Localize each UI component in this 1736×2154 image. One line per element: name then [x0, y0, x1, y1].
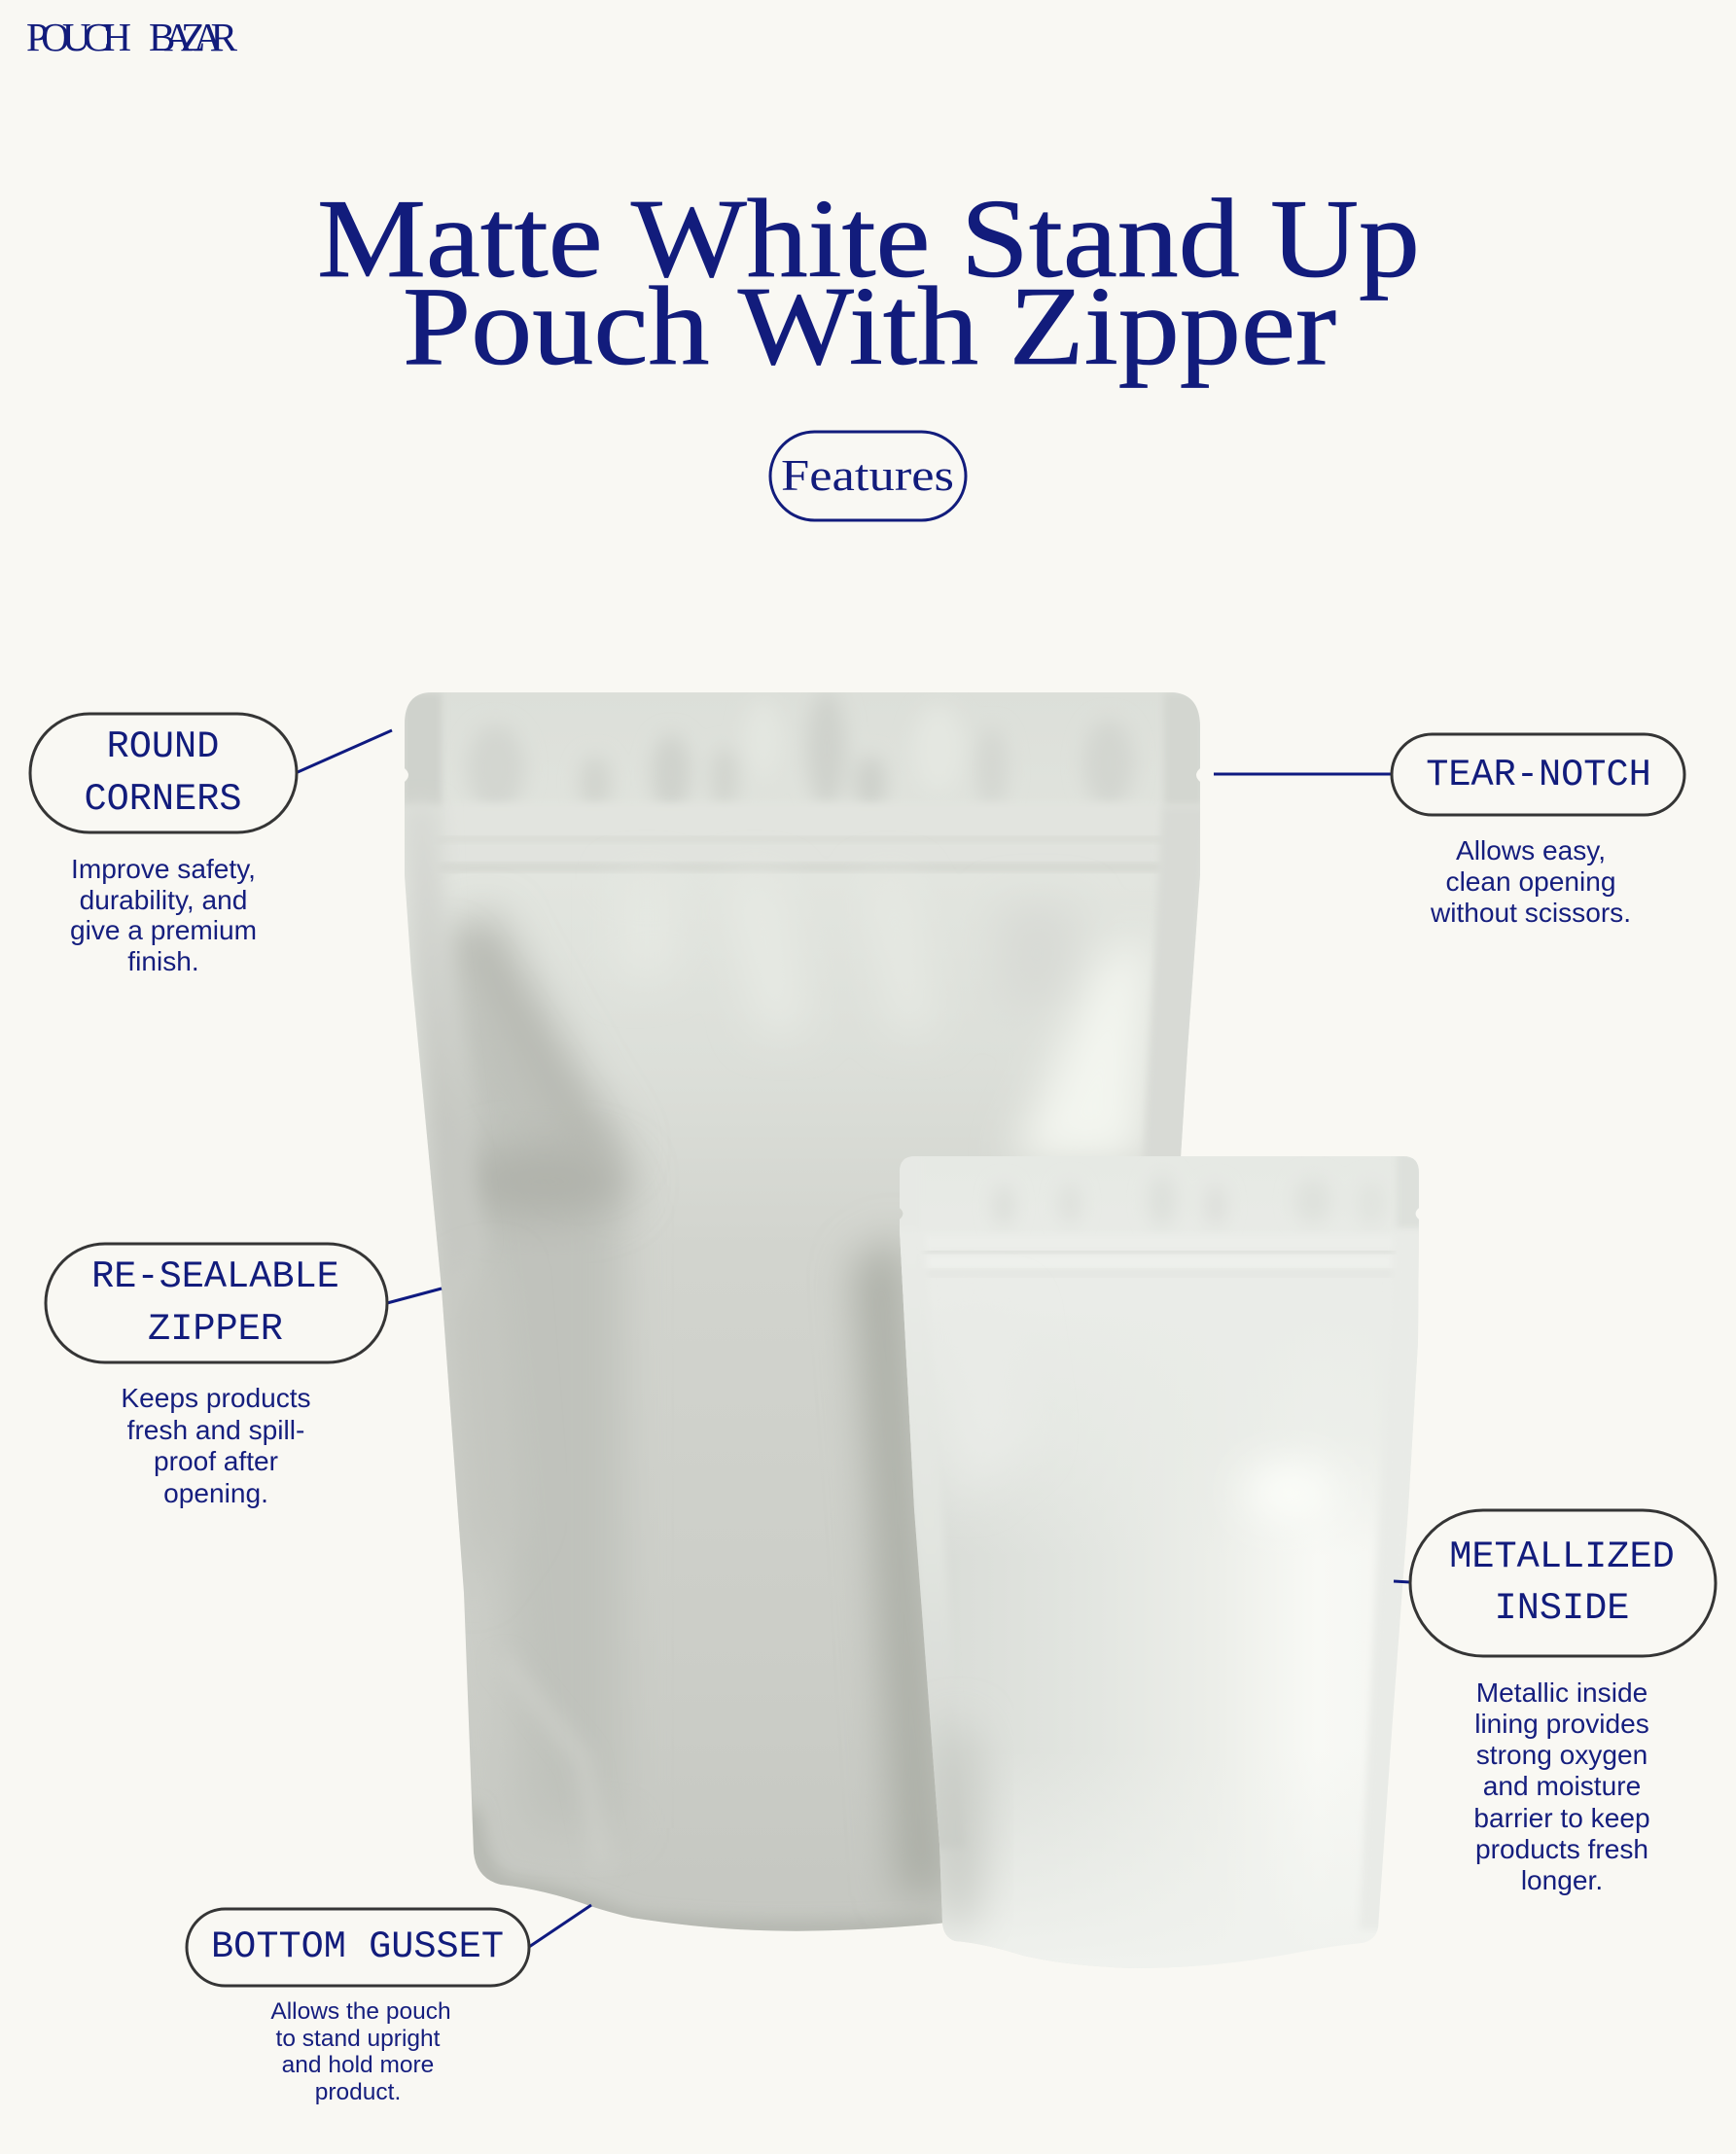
small pouch: header seals [1399, 1157, 1419, 1227]
connector line: metallized inside [1394, 1581, 1410, 1582]
large pouch: shadow beside small pouch [856, 1235, 948, 1896]
description: metallized inside: Metallic inside [1476, 1677, 1647, 1708]
pill: re-sealable zipper: RE-SEALABLE [91, 1255, 339, 1298]
features badge [770, 432, 966, 520]
pill: round corners: CORNERS [84, 778, 242, 821]
description: bottom gusset: and hold more [282, 2052, 434, 2078]
description: metallized inside: strong oxygen [1476, 1740, 1647, 1770]
description: round corners: durability, and [80, 885, 247, 915]
description: tear-notch: clean opening [1446, 866, 1615, 897]
large pouch: dark fold pocket [457, 1145, 632, 1218]
description: re-sealable zipper: proof after [154, 1446, 278, 1476]
features badge: Features [781, 450, 954, 500]
pill: metallized inside [1410, 1510, 1716, 1656]
large pouch: gusset crease [501, 1658, 603, 1867]
description: bottom gusset [270, 1998, 451, 2105]
small pouch: zipper band [920, 1235, 1397, 1276]
pill: round corners [30, 714, 297, 832]
logo: BAZAR [149, 15, 238, 59]
description: re-sealable zipper: Keeps products [121, 1383, 311, 1413]
description: round corners: give a premium [70, 915, 257, 945]
title [317, 177, 1420, 389]
pill: re-sealable zipper [46, 1244, 387, 1362]
description: round corners: finish. [127, 946, 199, 976]
small matte white pouch [890, 1148, 1435, 1974]
description: metallized inside [1473, 1677, 1650, 1895]
description: bottom gusset: to stand upright [276, 2026, 441, 2052]
pill: bottom gusset [187, 1909, 529, 1986]
large pouch: body highlights and shadows [443, 880, 1148, 1828]
description: tear-notch: Allows easy, [1456, 835, 1606, 865]
large pouch: zipper band [436, 803, 1165, 871]
description: metallized inside: lining provides [1474, 1709, 1649, 1739]
pill: tear-notch [1392, 734, 1684, 815]
large pouch: bottom edge shade [471, 1809, 939, 1931]
large pouch: diagonal dark fold [467, 924, 603, 1167]
description: tear-notch: without scissors. [1430, 898, 1631, 928]
pill: re-sealable zipper: ZIPPER [148, 1308, 283, 1351]
description: re-sealable zipper: fresh and spill- [127, 1415, 304, 1445]
description: round corners [70, 854, 257, 976]
small pouch: top header folds [1000, 1191, 1320, 1214]
large matte white pouch [389, 681, 1216, 1945]
pill: bottom gusset: BOTTOM GUSSET [211, 1925, 504, 1968]
connector line: round corners [298, 730, 392, 772]
description: bottom gusset: product. [315, 2079, 401, 2105]
description: round corners: Improve safety, [71, 854, 256, 884]
pill: round corners: ROUND [107, 725, 219, 768]
logo: POUCH [26, 15, 131, 59]
large pouch: top header folds [473, 699, 1129, 801]
callout: bottom gusset [187, 1905, 591, 2105]
description: metallized inside: products fresh [1475, 1834, 1648, 1864]
description: bottom gusset: Allows the pouch [270, 1998, 451, 2025]
description: metallized inside: longer. [1521, 1865, 1603, 1895]
small pouch: side seals [916, 1251, 1384, 1924]
connector line: re-sealable zipper [387, 1289, 442, 1303]
pill: metallized inside: INSIDE [1495, 1587, 1629, 1630]
callout: metallized inside [1394, 1510, 1716, 1895]
callout: re-sealable zipper [46, 1244, 442, 1508]
pill: tear-notch: TEAR-NOTCH [1426, 754, 1651, 796]
callout: tear-notch [1214, 734, 1684, 928]
description: metallized inside: and moisture [1483, 1771, 1641, 1801]
description: re-sealable zipper: opening. [163, 1478, 268, 1508]
small pouch: body highlights [1260, 1471, 1305, 1505]
logo [26, 15, 238, 59]
small pouch: bottom-left shade [933, 1721, 983, 1935]
callout: round corners [30, 714, 392, 976]
description: re-sealable zipper [121, 1383, 311, 1508]
title: Pouch With Zipper [403, 265, 1336, 389]
pill: metallized inside: METALLIZED [1449, 1536, 1675, 1578]
description: metallized inside: barrier to keep [1473, 1803, 1650, 1833]
connector line: tear-notch [1214, 772, 1392, 776]
large pouch: side seals [401, 692, 1206, 1595]
description: tear-notch [1430, 835, 1631, 928]
connector line: bottom gusset [529, 1905, 591, 1947]
title: Matte White Stand Up [317, 177, 1420, 301]
